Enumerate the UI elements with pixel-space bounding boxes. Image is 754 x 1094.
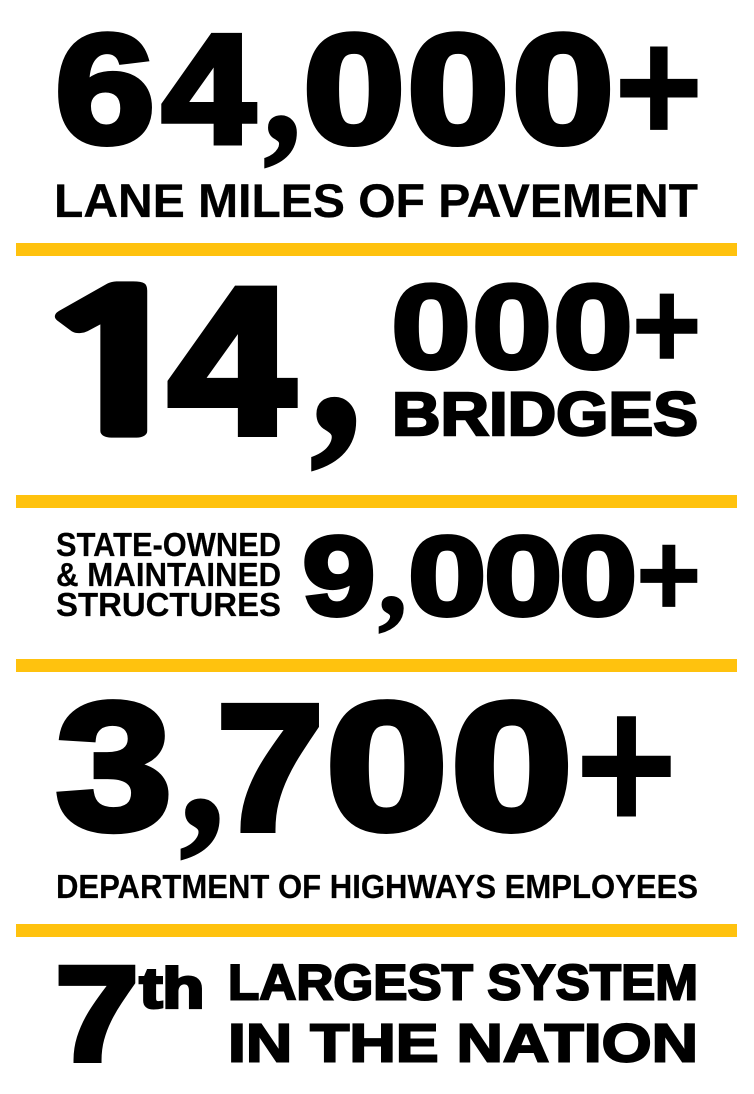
big number: 9,000+: 9 bbox=[302, 514, 375, 639]
big number: 9,000+: 0 bbox=[408, 514, 486, 639]
big number: 14,: , bbox=[310, 227, 362, 484]
big number: 64,000+: 0 bbox=[303, 2, 405, 176]
big number: 64,000+: 6 bbox=[55, 2, 155, 176]
label: state-owned and maintained structures: STRUCTURES bbox=[56, 586, 281, 623]
big number: 3,700+: 0 bbox=[326, 667, 448, 868]
big number: 64,000+: 0 bbox=[407, 2, 509, 176]
label: state-owned and maintained structures: & MAINTAINED bbox=[56, 556, 281, 593]
label: largest system in the nation bbox=[228, 954, 698, 1074]
big number: 9,000+: 0 bbox=[559, 514, 637, 639]
divider bar 2 bbox=[16, 495, 737, 508]
caption: department of highways employees: DEPARTMENT OF HIGHWAYS EMPLOYEES bbox=[56, 868, 698, 905]
big number: 3,700+: 7 bbox=[217, 668, 324, 868]
big number: 9,000+: + bbox=[638, 511, 700, 639]
number: 000+: 0 bbox=[553, 261, 633, 394]
label: largest system in the nation: LARGEST SYSTEM bbox=[228, 954, 698, 1010]
divider bar 1 bbox=[16, 243, 737, 256]
panel: employees bbox=[56, 656, 698, 905]
big number: 3,700+: 0 bbox=[451, 667, 573, 868]
number: 000+ bbox=[391, 258, 700, 394]
panel: state-owned structures bbox=[56, 509, 700, 640]
number: 000+: 0 bbox=[391, 261, 471, 394]
big number: 3,700+: , bbox=[180, 656, 225, 870]
big number: 3,700+: 3 bbox=[56, 667, 172, 868]
big number: 3,700+: + bbox=[578, 659, 676, 870]
big number: 9,000+ bbox=[302, 509, 700, 640]
big number: 64,000+: + bbox=[617, 0, 701, 173]
number: 000+: 0 bbox=[472, 261, 552, 394]
divider bar 4 bbox=[16, 924, 737, 937]
divider bar 3 bbox=[16, 659, 737, 672]
rank: 7th bbox=[56, 940, 204, 1089]
rank: 7th: 7 bbox=[56, 940, 138, 1089]
big number: 9,000+: , bbox=[378, 509, 407, 640]
panel: lane miles bbox=[54, 0, 701, 227]
label: state-owned and maintained structures: STATE-OWNED bbox=[56, 526, 281, 563]
label: state-owned and maintained structures bbox=[56, 526, 281, 623]
big number: 64,000+: 4 bbox=[162, 2, 255, 176]
caption: lane miles of pavement: LANE MILES OF PAVEMENT bbox=[54, 174, 698, 227]
rank: 7th: th bbox=[140, 956, 204, 1020]
panel: national rank bbox=[56, 940, 698, 1089]
big number: 14,: 4 bbox=[169, 246, 294, 476]
number: 000+: + bbox=[634, 258, 700, 392]
label: largest system in the nation: IN THE NATION bbox=[228, 1014, 698, 1074]
big number: 9,000+: 0 bbox=[484, 514, 562, 639]
panel: bridges bbox=[21, 227, 700, 484]
big number: 14,: 1 bbox=[21, 270, 213, 463]
label: bridges: BRIDGES bbox=[392, 380, 698, 449]
big number: 64,000+ bbox=[55, 0, 701, 177]
big number: 64,000+: 0 bbox=[512, 2, 614, 176]
big number: 14, bbox=[21, 227, 362, 484]
big number: 3,700+ bbox=[56, 656, 676, 870]
